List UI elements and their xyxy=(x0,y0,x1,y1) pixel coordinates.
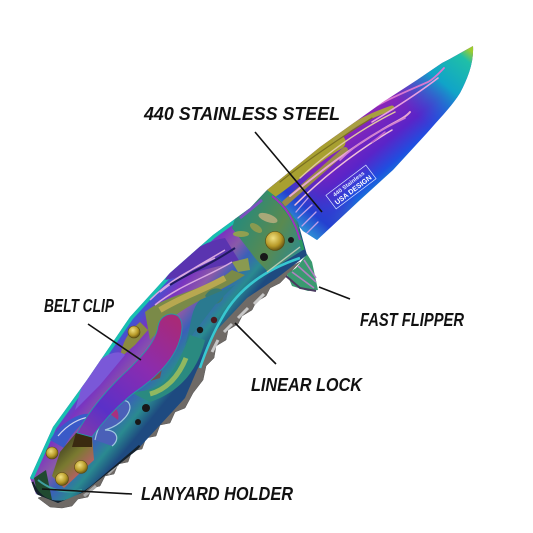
serrated back spacer xyxy=(38,262,300,508)
callout: fast flipper xyxy=(319,287,464,330)
callout: linear lock xyxy=(235,323,364,395)
callout: linear lock: LINEAR LOCK xyxy=(251,375,364,395)
blade xyxy=(267,46,474,240)
tail swirl xyxy=(95,401,130,446)
lower end plate xyxy=(52,433,94,488)
holes xyxy=(135,237,294,425)
leaf details xyxy=(258,212,278,224)
flipper xyxy=(286,254,318,291)
belt clip xyxy=(77,314,182,437)
callout: 440 stainless steel xyxy=(143,104,340,212)
callout: fast flipper: FAST FLIPPER xyxy=(360,310,464,330)
knife xyxy=(20,40,480,520)
lion engraved body xyxy=(165,238,240,280)
fish scales body xyxy=(130,335,205,402)
callout: 440 stainless steel: 440 STAINLESS STEEL xyxy=(143,104,340,124)
blade etched logo: USA DESIGN xyxy=(334,175,373,207)
callout: belt clip xyxy=(44,296,141,360)
bolster xyxy=(232,190,303,272)
handle xyxy=(30,190,307,503)
callout: lanyard holder: LANYARD HOLDER xyxy=(141,484,293,504)
callout: belt clip: BELT CLIP xyxy=(44,296,115,316)
cyan lock line xyxy=(200,258,300,368)
screws xyxy=(46,232,284,486)
infographic: rainbow folding knife with feature callouts xyxy=(30,46,474,508)
callout: lanyard holder xyxy=(42,484,293,504)
blade etched logo xyxy=(326,165,376,209)
dark rim xyxy=(32,446,140,502)
blade etched logo: 440 Stainless xyxy=(332,171,366,198)
flame etching xyxy=(272,68,444,234)
